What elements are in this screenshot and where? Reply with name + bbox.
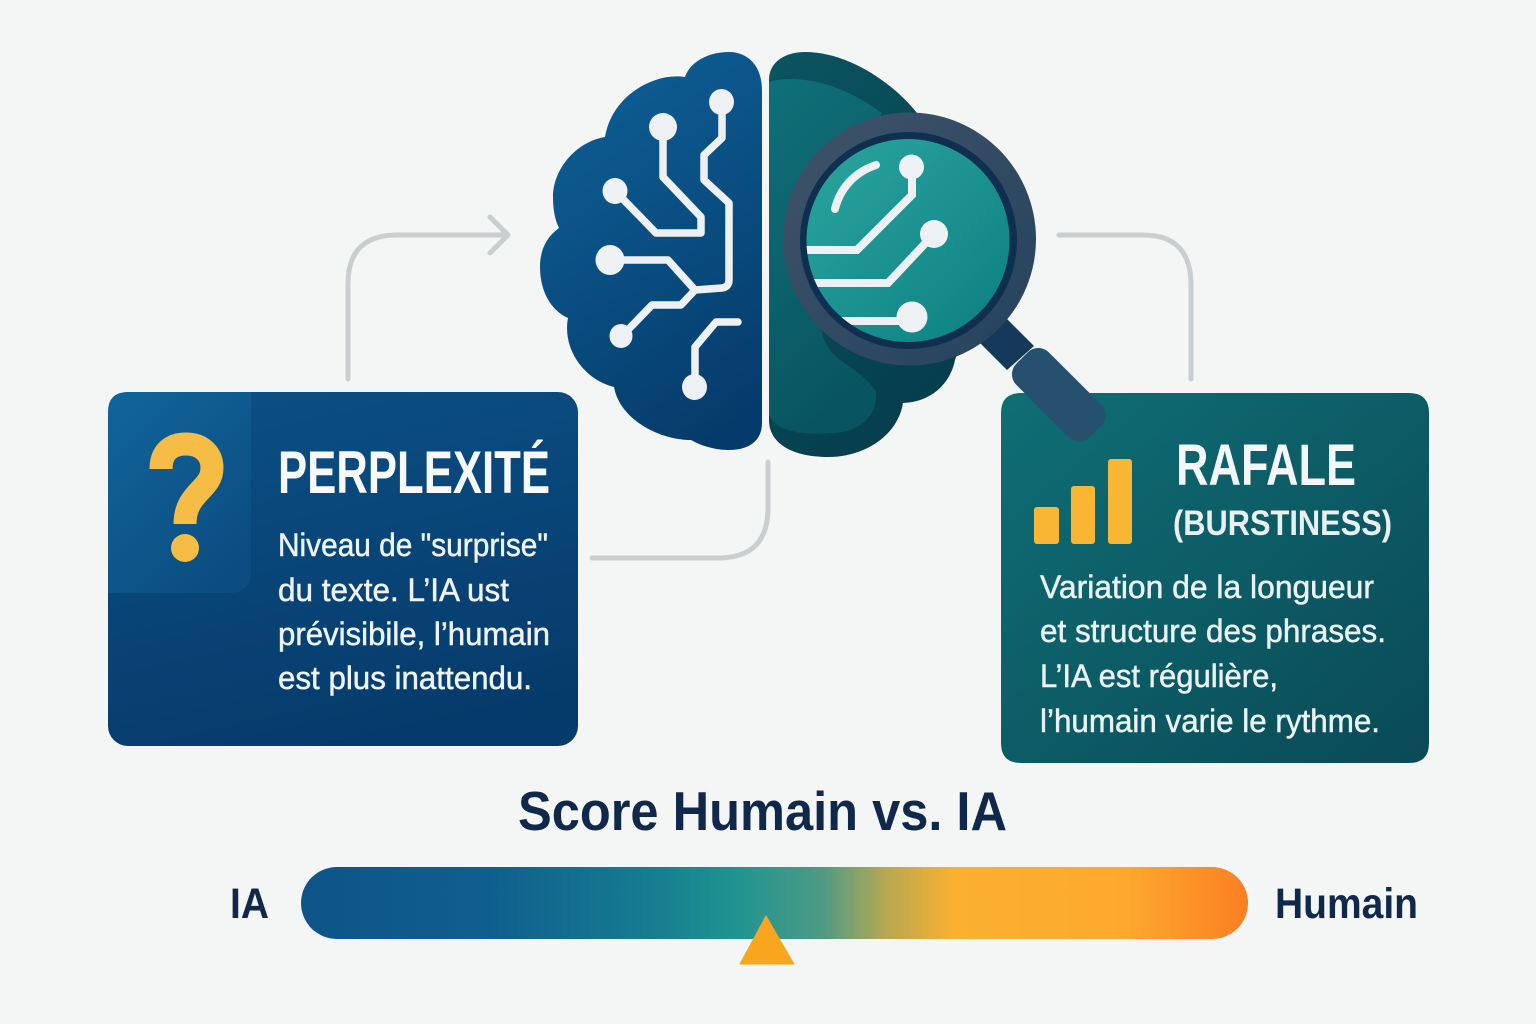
icon: question mark	[161, 444, 212, 562]
text block: rafale description	[1040, 569, 1386, 739]
handle grip	[1006, 342, 1112, 448]
icon panel	[108, 392, 251, 593]
heading: perplexité: PERPLEXITÉ	[278, 439, 550, 506]
circuit nodes	[596, 89, 734, 400]
panel: rafale	[1001, 393, 1429, 763]
circuit traces	[615, 110, 738, 387]
infographic	[108, 52, 1429, 964]
text block: rafale description: et structure des phrases.	[1040, 613, 1386, 649]
lens	[806, 139, 1010, 342]
score gauge bar	[301, 867, 1248, 939]
connector: left card to brain with arrow	[348, 217, 508, 379]
panel: perplexité	[108, 392, 578, 746]
icon: brain left hemisphere with circuits	[540, 52, 762, 450]
icon: bar chart	[1034, 459, 1132, 544]
label: Humain: Humain	[1275, 880, 1418, 928]
gauge marker	[740, 916, 794, 964]
text block: rafale description: L’IA est régulière,	[1040, 658, 1278, 694]
connector: brain to left card	[592, 462, 768, 558]
outer ring	[783, 112, 1036, 366]
text block: perplexité description: est plus inattendu.	[278, 660, 532, 696]
text block: rafale description: Variation de la longueur	[1040, 569, 1374, 605]
icon: magnifying glass	[783, 112, 1112, 448]
text block: perplexité description: Niveau de "surprise"	[278, 527, 548, 563]
subheading: burstiness: (BURSTINESS)	[1173, 504, 1392, 543]
icon: brain right hemisphere	[769, 52, 1000, 457]
lens circuits	[800, 154, 948, 332]
connector: magnifier to right card	[1059, 235, 1191, 379]
text block: perplexité description	[278, 527, 550, 696]
text block: rafale description: l’humain varie le rythme.	[1040, 703, 1380, 739]
title: Score Humain vs. IA	[518, 780, 1007, 842]
text block: perplexité description: prévisibile, l’humain	[278, 616, 550, 652]
text block: perplexité description: du texte. L’IA ust	[278, 572, 509, 608]
lens glare	[835, 165, 876, 209]
heading: rafale: RAFALE	[1176, 433, 1356, 498]
label: IA: IA	[230, 880, 269, 928]
handle neck	[979, 317, 1034, 370]
